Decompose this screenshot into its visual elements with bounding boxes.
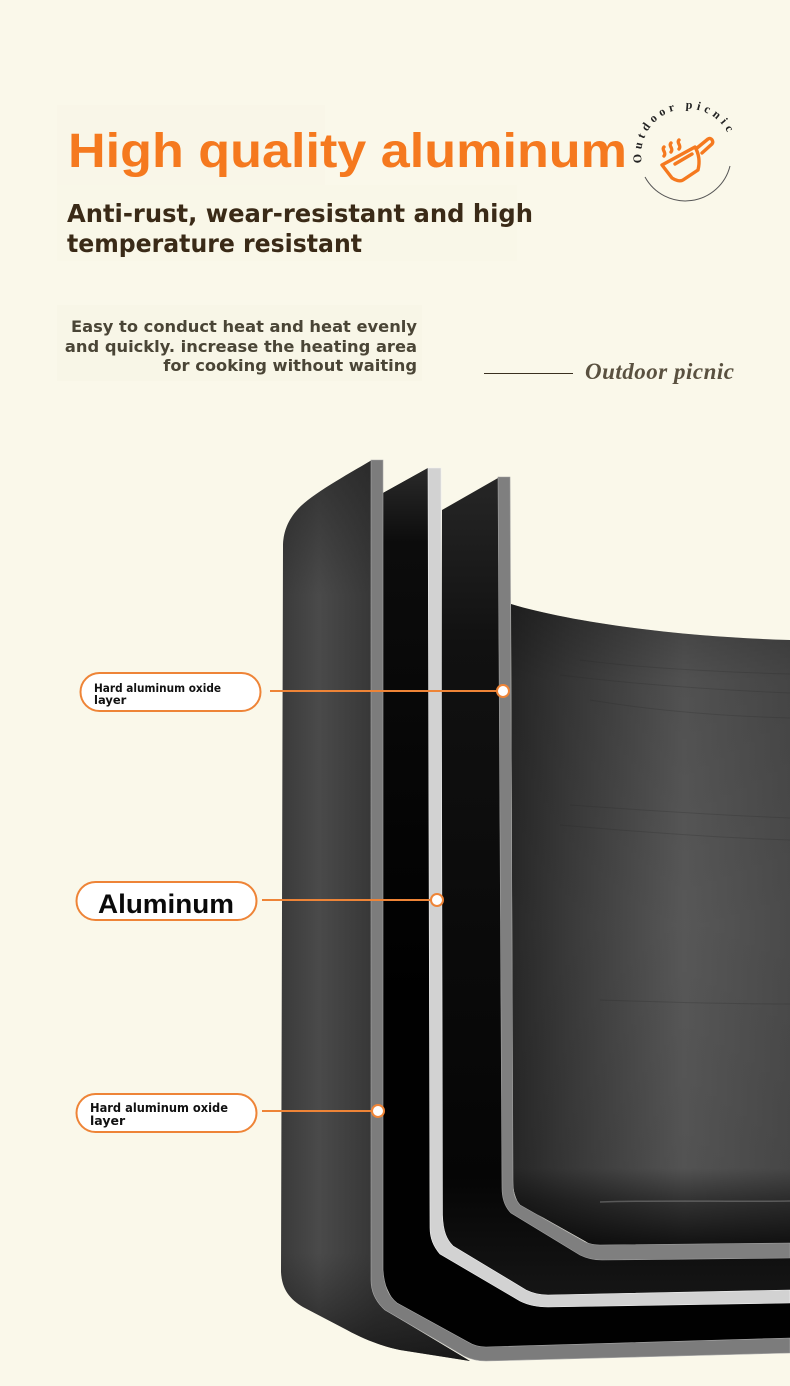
outer wall surface [281,460,470,1361]
black gap 1 [383,468,790,1350]
callout: bottom oxide layer [76,1094,384,1132]
pan cross-section [281,460,790,1361]
description text: and quickly. increase the heating area [65,337,417,356]
callout: top oxide layer [80,673,509,711]
outdoor picnic tagline: Outdoor picnic [585,359,734,384]
callout: bottom oxide layer: Hard aluminum oxide [90,1100,228,1115]
inner pan shading [511,604,790,1245]
strip: aluminum core [428,468,790,1307]
callout: aluminum: Aluminum [98,889,234,919]
black gap 2 [440,478,790,1300]
callout: aluminum [76,882,443,920]
floor highlight [600,1201,790,1202]
icon: cooking pan [662,138,713,181]
description text: for cooking without waiting [163,356,417,375]
description text: Easy to conduct heat and heat evenly [71,317,417,336]
gap shade 1 [383,468,430,1000]
inner pan surface [511,604,790,1245]
callout: bottom oxide layer: layer [90,1113,126,1128]
strip: outer oxide layer [371,460,790,1361]
callout: top oxide layer: layer [94,693,127,707]
title: High quality aluminum [68,124,627,178]
brushed streaks [560,660,790,1004]
subheading: temperature resistant [67,229,362,258]
badge: outdoor picnic pan icon [633,102,732,202]
subheading [67,199,533,258]
callout: top oxide layer: Hard aluminum oxide [94,681,221,695]
strip: inner oxide layer [498,477,790,1260]
outer wall shading [281,460,470,1361]
badge: outdoor picnic pan icon: Outdoor picnic [633,102,732,163]
description text [65,317,417,375]
subheading: Anti-rust, wear-resistant and high [67,199,533,228]
text backing patches [57,105,517,381]
